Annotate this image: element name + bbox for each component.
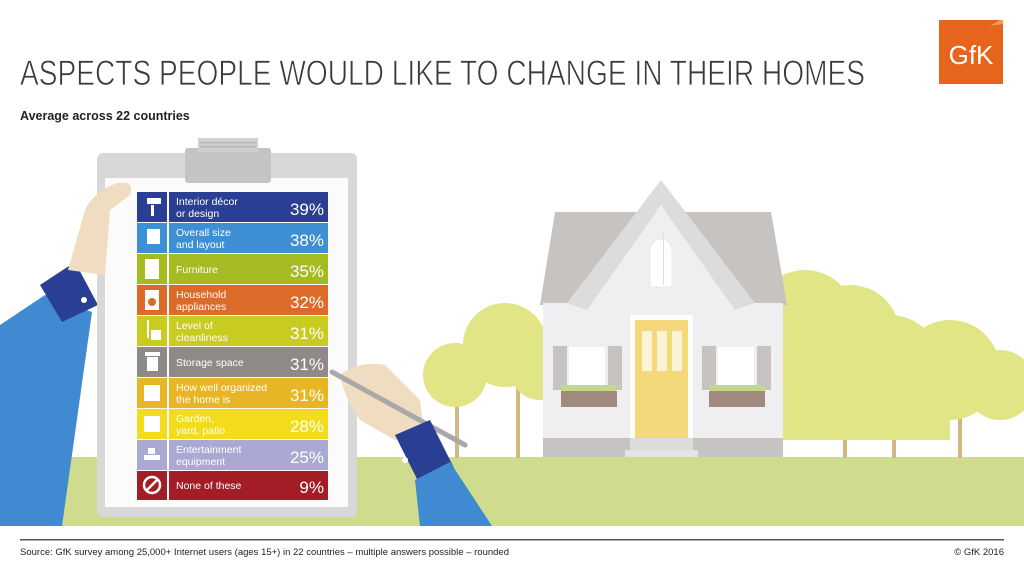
footer rule bbox=[20, 539, 1004, 540]
row: furniture: Furniture bbox=[176, 264, 218, 276]
row: furniture bbox=[137, 254, 328, 284]
bar list bbox=[137, 192, 328, 500]
row: storage space: 31% bbox=[290, 355, 324, 374]
logo: GfK: GfK bbox=[949, 40, 994, 70]
row: storage space bbox=[137, 347, 328, 377]
row: overall size: Overall size bbox=[176, 227, 231, 239]
row: entertainment: Entertainment bbox=[176, 444, 241, 456]
row: entertainment bbox=[137, 440, 328, 470]
row: garden: yard, patio bbox=[176, 425, 225, 437]
row: none bbox=[137, 471, 328, 500]
row: furniture: 35% bbox=[290, 262, 324, 281]
row: household appliances: 32% bbox=[290, 293, 324, 312]
row: interior decor: or design bbox=[176, 208, 219, 220]
row: household appliances: appliances bbox=[176, 301, 226, 313]
row: none: 9% bbox=[299, 478, 324, 497]
row: entertainment: 25% bbox=[290, 448, 324, 467]
subtitle: Average across 22 countries bbox=[20, 109, 190, 123]
row: organized: How well organized bbox=[176, 382, 267, 394]
row: garden: Garden, bbox=[176, 413, 214, 425]
row: entertainment: equipment bbox=[176, 456, 225, 468]
row: overall size: and layout bbox=[176, 239, 225, 251]
row: organized: 31% bbox=[290, 386, 324, 405]
trees bbox=[423, 270, 1024, 458]
row: none: None of these bbox=[176, 480, 242, 492]
row: garden bbox=[137, 409, 328, 439]
row: organized bbox=[137, 378, 328, 408]
right hand with pen bbox=[332, 364, 492, 526]
copyright: © GfK 2016 bbox=[954, 547, 1004, 558]
row: overall size bbox=[137, 223, 328, 253]
row: interior decor: 39% bbox=[290, 200, 324, 219]
row: interior decor: Interior décor bbox=[176, 196, 238, 208]
left arm holding clipboard bbox=[0, 262, 98, 526]
row: storage space: Storage space bbox=[176, 357, 244, 369]
left hand bbox=[68, 182, 131, 275]
row: cleanliness: Level of bbox=[176, 320, 213, 332]
source note: Source: GfK survey among 25,000+ Internet users (ages 15+) in 22 countries – multiple answers possible – rounded bbox=[20, 547, 509, 558]
row: overall size: 38% bbox=[290, 231, 324, 250]
row: household appliances: Household bbox=[176, 289, 226, 301]
ground bbox=[0, 457, 1024, 526]
house bbox=[540, 180, 787, 457]
row: cleanliness: cleanliness bbox=[176, 332, 228, 344]
row: interior decor bbox=[137, 192, 328, 222]
row: household appliances bbox=[137, 285, 328, 315]
row: garden: 28% bbox=[290, 417, 324, 436]
clipboard bbox=[97, 138, 357, 517]
row: cleanliness bbox=[137, 316, 328, 346]
logo: GfK bbox=[939, 20, 1003, 84]
row: cleanliness: 31% bbox=[290, 324, 324, 343]
row: organized: the home is bbox=[176, 394, 230, 406]
